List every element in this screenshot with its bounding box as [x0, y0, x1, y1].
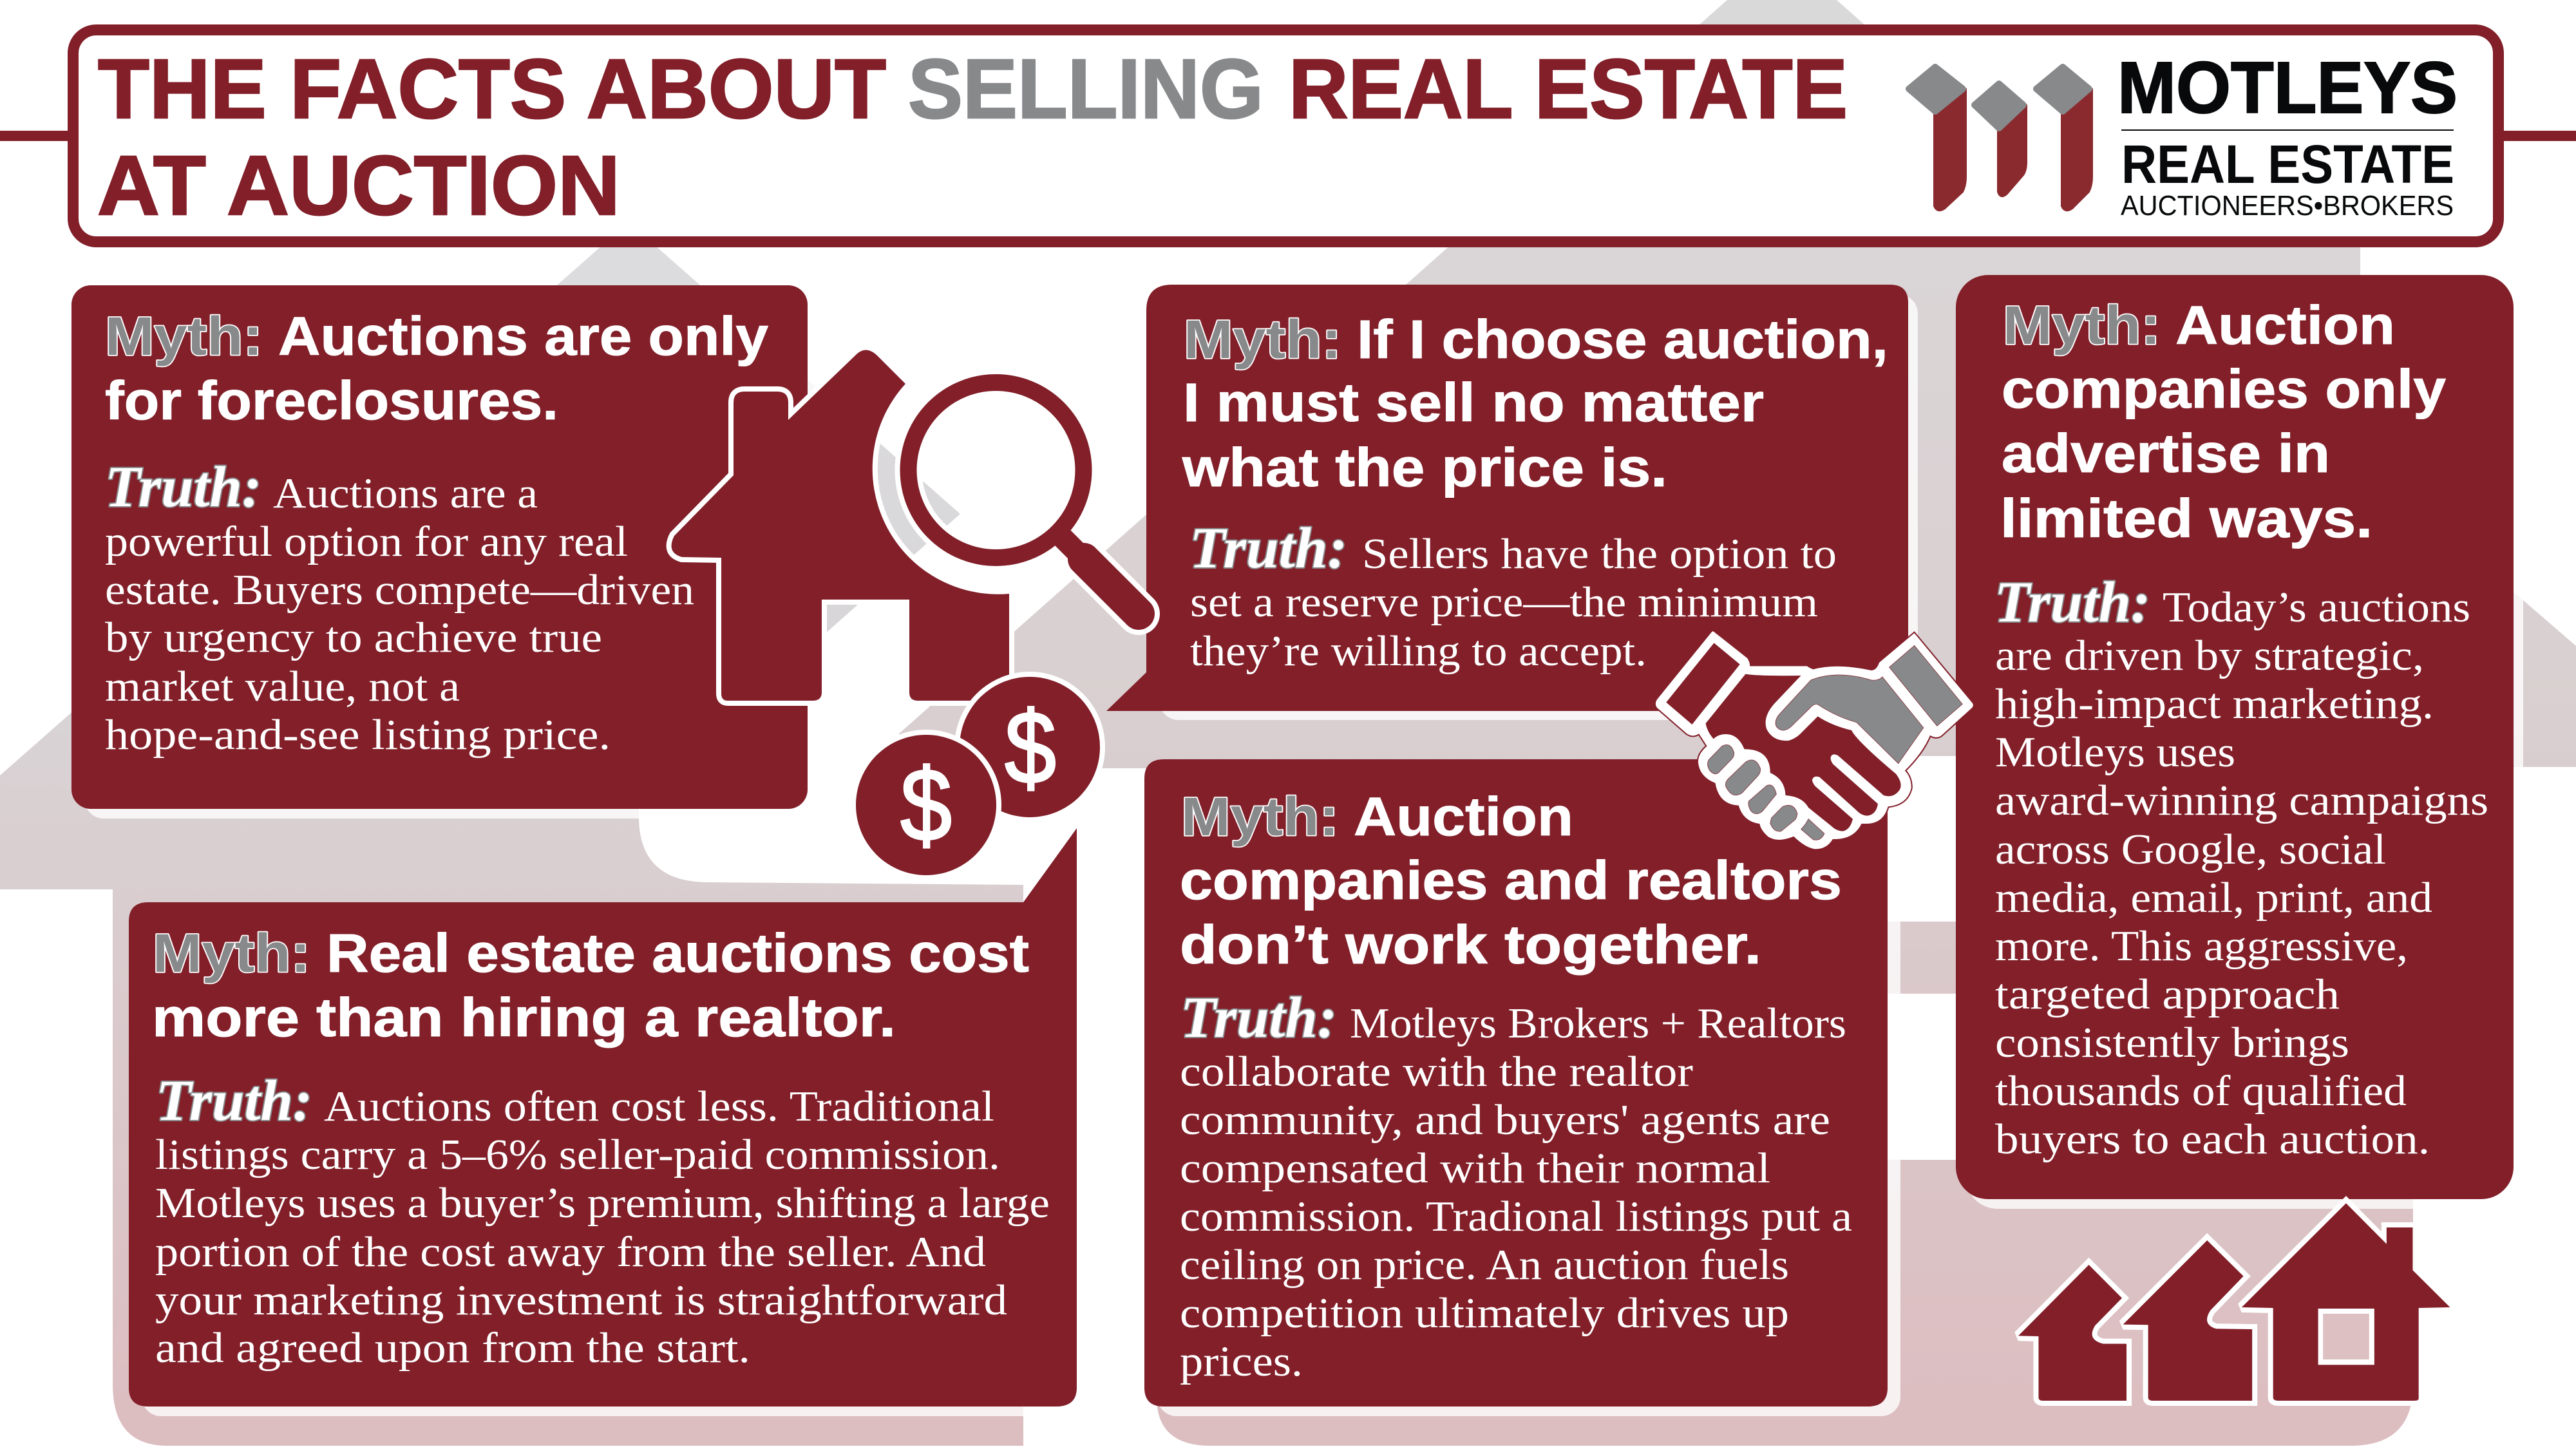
truth text: Motleys Brokers + Realtors [1350, 999, 1846, 1047]
myth heading: companies and realtors [1180, 850, 1842, 911]
title: THE FACTS ABOUT [98, 41, 886, 136]
panel: myth cost [129, 828, 1077, 1406]
truth text [1994, 571, 2488, 1163]
myth heading: Myth: [1184, 309, 1341, 370]
myth heading: for foreclosures. [105, 370, 558, 431]
truth text: media, email, print, and [1995, 874, 2432, 922]
background: window cutout upper [1880, 756, 1964, 922]
truth text: and agreed upon from the start. [155, 1324, 750, 1372]
myth heading: more than hiring a realtor. [152, 987, 896, 1048]
panel: myth advertising [1956, 275, 2514, 1199]
background: left house silhouette [0, 222, 1023, 1446]
myth heading: Real estate auctions cost [327, 923, 1029, 983]
truth text [105, 455, 694, 759]
myth heading: limited ways. [2000, 488, 2372, 549]
truth text: Truth: [1994, 571, 2150, 634]
myth heading: Auction [2175, 295, 2395, 355]
logo: Motleys Real Estate [1909, 47, 2458, 222]
icon: dollar coins: $ [900, 747, 952, 862]
myth heading: Myth: [105, 306, 263, 366]
truth text [1180, 986, 1852, 1385]
myth heading [1182, 309, 1888, 498]
icon: house with magnifying glass [672, 350, 1139, 701]
truth text: Auctions are a [273, 469, 538, 517]
truth text [155, 1069, 1050, 1372]
truth text: commission. Tradional listings put a [1180, 1193, 1852, 1240]
truth text: prices. [1180, 1338, 1303, 1385]
icon: magnifying glass [908, 383, 1139, 614]
truth text: they’re willing to accept. [1190, 627, 1647, 675]
truth text: powerful option for any real [105, 518, 628, 565]
truth text: more. This aggressive, [1995, 922, 2408, 970]
truth text: listings carry a 5–6% seller-paid commission. [155, 1131, 1000, 1179]
truth text: buyers to each auction. [1995, 1115, 2430, 1163]
myth heading: companies only [2002, 359, 2446, 419]
header panel [73, 30, 2499, 242]
myth heading: Auctions are only [278, 306, 768, 366]
truth text: Today’s auctions [2163, 583, 2470, 631]
background: window cutout lower [1880, 994, 1964, 1160]
background: right house silhouette [898, 0, 2576, 1446]
panel: myth realtors [1144, 759, 1888, 1406]
truth text: Truth: [1180, 986, 1337, 1050]
myth heading: don’t work together. [1180, 914, 1761, 975]
truth text: compensated with their normal [1180, 1144, 1770, 1192]
truth text: Truth: [156, 1069, 312, 1133]
truth text: estate. Buyers compete—driven [105, 566, 694, 614]
title [97, 41, 1848, 232]
truth text: hope-and-see listing price. [105, 711, 611, 759]
panel: myth reserve price [1106, 285, 1908, 711]
myth heading: I must sell no matter [1183, 372, 1764, 433]
myth heading [2000, 295, 2446, 549]
truth text: your marketing investment is straightforward [155, 1276, 1007, 1324]
card shadows [84, 285, 2523, 1416]
truth text: community, and buyers' agents are [1180, 1096, 1830, 1144]
truth text: targeted approach [1995, 971, 2340, 1018]
truth text: Sellers have the option to [1362, 530, 1837, 578]
logo: Motleys Real Estate: REAL ESTATE [2121, 134, 2454, 194]
truth text: high-impact marketing. [1995, 680, 2434, 728]
truth text: market value, not a [105, 663, 460, 710]
truth text: thousands of qualified [1995, 1067, 2407, 1115]
title: AT AUCTION [97, 138, 620, 232]
truth text: portion of the cost away from the seller. And [155, 1228, 986, 1276]
myth heading [105, 306, 768, 431]
myth heading [1180, 786, 1842, 975]
truth text: consistently brings [1995, 1019, 2349, 1066]
header connector line right [2499, 131, 2576, 141]
truth text: Auctions often cost less. Traditional [324, 1083, 994, 1130]
myth heading: what the price is. [1182, 437, 1667, 498]
truth text: Motleys uses [1995, 728, 2235, 776]
myth heading: If I choose auction, [1357, 309, 1888, 370]
panel: myth foreclosures [71, 285, 808, 809]
icon: row of houses [2018, 1203, 2450, 1401]
logo: Motleys Real Estate: AUCTIONEERS•BROKERS [2121, 190, 2454, 222]
truth text: ceiling on price. An auction fuels [1180, 1241, 1789, 1289]
myth heading: Myth: [2003, 295, 2161, 355]
icon: dollar coins [856, 677, 1100, 875]
truth text: by urgency to achieve true [105, 614, 602, 661]
title: SELLING [908, 41, 1264, 136]
myth heading [152, 923, 1029, 1048]
header connector line left [0, 131, 71, 141]
truth text: Truth: [1189, 516, 1347, 580]
myth heading: Myth: [153, 923, 310, 983]
truth text: competition ultimately drives up [1180, 1289, 1789, 1337]
truth text: Truth: [105, 455, 261, 519]
truth text [1189, 516, 1837, 675]
truth text: across Google, social [1995, 826, 2386, 873]
icon: dollar coins: $ [1005, 690, 1056, 805]
myth heading: Auction [1354, 786, 1573, 847]
truth text: set a reserve price—the minimum [1190, 578, 1818, 626]
truth text: collaborate with the realtor [1180, 1048, 1693, 1095]
title: REAL ESTATE [1289, 41, 1848, 136]
truth text: Motleys uses a buyer’s premium, shifting a large [155, 1179, 1050, 1227]
myth heading: Myth: [1181, 786, 1339, 847]
truth text: award-winning campaigns [1995, 777, 2488, 824]
myth heading: advertise in [2002, 423, 2330, 484]
logo: Motleys Real Estate: MOTLEYS [2117, 47, 2458, 128]
icon: handshake [1655, 630, 1974, 849]
truth text: are driven by strategic, [1995, 632, 2424, 679]
